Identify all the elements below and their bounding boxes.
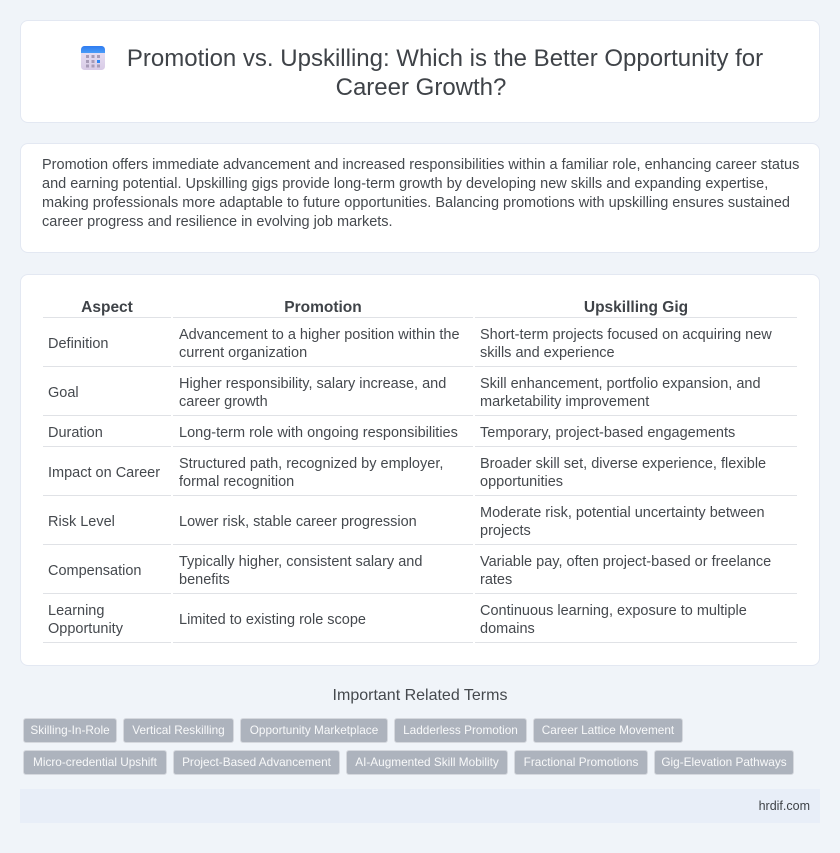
comparison table: Aspect <box>81 298 133 316</box>
tag <box>123 718 234 743</box>
title <box>127 45 763 101</box>
panel: introduction <box>20 143 820 253</box>
panel: comparison table <box>20 274 820 666</box>
tag <box>346 750 508 775</box>
tag: Project-Based Advancement <box>182 755 331 769</box>
tag: Fractional Promotions <box>524 755 638 769</box>
tag <box>394 718 527 743</box>
comparison table: Continuous learning, exposure to multiple <box>480 603 747 619</box>
comparison table: Limited to existing role scope <box>179 612 366 628</box>
title: Career Growth? <box>336 74 506 101</box>
comparison table: Typically higher, consistent salary and <box>179 554 422 570</box>
tag: Vertical Reskilling <box>132 723 225 737</box>
comparison table: Impact on Career <box>48 465 160 481</box>
tag: Micro-credential Upshift <box>33 755 157 769</box>
comparison table: Learning <box>48 603 104 619</box>
comparison table: Advancement to a higher position within the <box>179 327 460 343</box>
comparison table: Structured path, recognized by employer, <box>179 456 443 472</box>
tag <box>240 718 388 743</box>
tag <box>173 750 340 775</box>
comparison table: Skill enhancement, portfolio expansion, and <box>480 376 761 392</box>
text block: introduction <box>42 157 799 230</box>
title: Promotion vs. Upskilling: Which is the Better Opportunity for <box>127 45 763 72</box>
tag: AI-Augmented Skill Mobility <box>355 755 499 769</box>
comparison table: Duration <box>48 425 103 441</box>
tag: Career Lattice Movement <box>542 723 674 737</box>
comparison table: Opportunity <box>48 621 123 637</box>
tag <box>533 718 683 743</box>
comparison table <box>43 298 797 643</box>
heading: important related terms: Important Related Terms <box>333 687 507 704</box>
icon: calendar <box>81 46 105 70</box>
comparison table: Promotion <box>284 298 362 316</box>
comparison table: Higher responsibility, salary increase, and <box>179 376 446 392</box>
comparison table: current organization <box>179 345 307 361</box>
tag: Skilling-In-Role <box>30 723 110 737</box>
text block: introduction: Promotion offers immediate advancement and increased responsibilities within a familiar role, enhancing career status <box>42 157 799 173</box>
comparison table: Lower risk, stable career progression <box>179 514 417 530</box>
comparison table: domains <box>480 621 535 637</box>
footer: hrdif.com <box>759 799 810 813</box>
comparison table: projects <box>480 523 531 539</box>
text block: introduction: making professionals more adaptable to future opportunities. Balancing promotions with upskilling ensures sustained <box>42 195 790 211</box>
tag <box>23 718 117 743</box>
comparison table: career growth <box>179 394 268 410</box>
comparison table: Compensation <box>48 563 142 579</box>
footer <box>20 789 820 823</box>
panel: title header <box>20 20 820 123</box>
comparison table: Risk Level <box>48 514 115 530</box>
comparison table: Definition <box>48 336 108 352</box>
comparison table: rates <box>480 572 512 588</box>
tag: Gig-Elevation Pathways <box>661 755 787 769</box>
tag <box>23 750 167 775</box>
tag <box>654 750 794 775</box>
comparison table: marketability improvement <box>480 394 649 410</box>
comparison table: Moderate risk, potential uncertainty between <box>480 505 765 521</box>
comparison table: Goal <box>48 385 79 401</box>
comparison table: Upskilling Gig <box>584 298 688 316</box>
text block: introduction: and earning potential. Upskilling gigs provide long-term growth by developing new skills and expanding expertise, <box>42 176 768 192</box>
comparison table: opportunities <box>480 474 563 490</box>
text block: introduction: career progress and resilience in evolving job markets. <box>42 214 393 230</box>
comparison table: Short-term projects focused on acquiring new <box>480 327 772 343</box>
comparison table: Long-term role with ongoing responsibilities <box>179 425 458 441</box>
comparison table: benefits <box>179 572 230 588</box>
comparison table: formal recognition <box>179 474 294 490</box>
comparison table: Temporary, project-based engagements <box>480 425 735 441</box>
tag <box>514 750 648 775</box>
tag: Opportunity Marketplace <box>250 723 378 737</box>
comparison table: Variable pay, often project-based or freelance <box>480 554 771 570</box>
tag: Ladderless Promotion <box>403 723 518 737</box>
comparison table: skills and experience <box>480 345 615 361</box>
comparison table: Broader skill set, diverse experience, flexible <box>480 456 766 472</box>
